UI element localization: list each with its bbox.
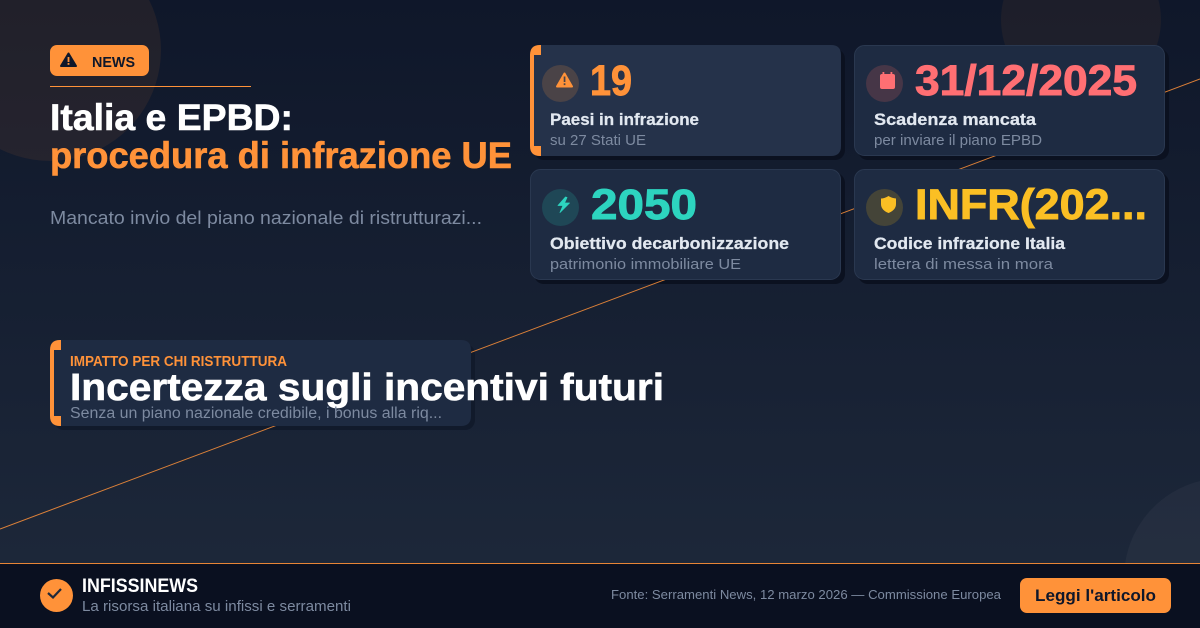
title: Italia e EPBD: [50,96,293,138]
panel: stat 2050: patrimonio immobiliare UE [550,256,741,273]
subtitle: Mancato invio del piano nazionale di ristrutturazi... [50,207,482,228]
icon: logo check [40,579,73,612]
icon: shield [866,189,903,226]
panel: stat deadline: 31/12/2025 [915,57,1137,105]
news badge [50,45,149,76]
panel: stat 19: 19 [590,57,632,105]
panel: stat deadline [854,46,1164,156]
panel: impact: Senza un piano nazionale credibile, i bonus alla riq... [70,405,442,422]
panel: stat 19 [530,45,841,156]
panel: stat 2050 [530,170,840,280]
icon: calendar [866,65,903,102]
news badge: NEWS [92,55,135,71]
panel: impact: Incertezza sugli incentivi futuri [70,367,664,409]
badge underline [50,86,251,87]
button: Leggi l'articolo [1035,586,1156,605]
panel: stat deadline: per inviare il piano EPBD [874,132,1042,149]
source: Fonte: Serramenti News, 12 marzo 2026 — Commissione Europea [611,587,1002,602]
tagline: La risorsa italiana su infissi e serramenti [82,599,351,615]
panel: stat infraction code: INFR(202... [915,181,1147,229]
icon: warning [542,65,579,102]
title: procedura di infrazione UE [50,134,512,176]
panel: stat 19: Paesi in infrazione [550,111,699,129]
brand: INFISSINEWS [82,575,198,597]
icon: lightning bolt [542,189,579,226]
panel: stat 19: su 27 Stati UE [550,132,646,149]
panel: stat 2050: Obiettivo decarbonizzazione [550,235,789,253]
button [1020,578,1171,613]
panel: stat infraction code: lettera di messa in mora [874,256,1054,273]
panel: stat 2050: 2050 [591,181,697,229]
footer [0,563,1200,628]
panel: stat infraction code [854,170,1164,280]
title [50,96,512,176]
panel: stat infraction code: Codice infrazione Italia [874,235,1066,253]
panel: stat deadline: Scadenza mancata [874,111,1037,129]
panel: impact [50,340,664,426]
icon: warning triangle [61,54,76,66]
panel: impact: IMPATTO PER CHI RISTRUTTURA [70,354,287,370]
